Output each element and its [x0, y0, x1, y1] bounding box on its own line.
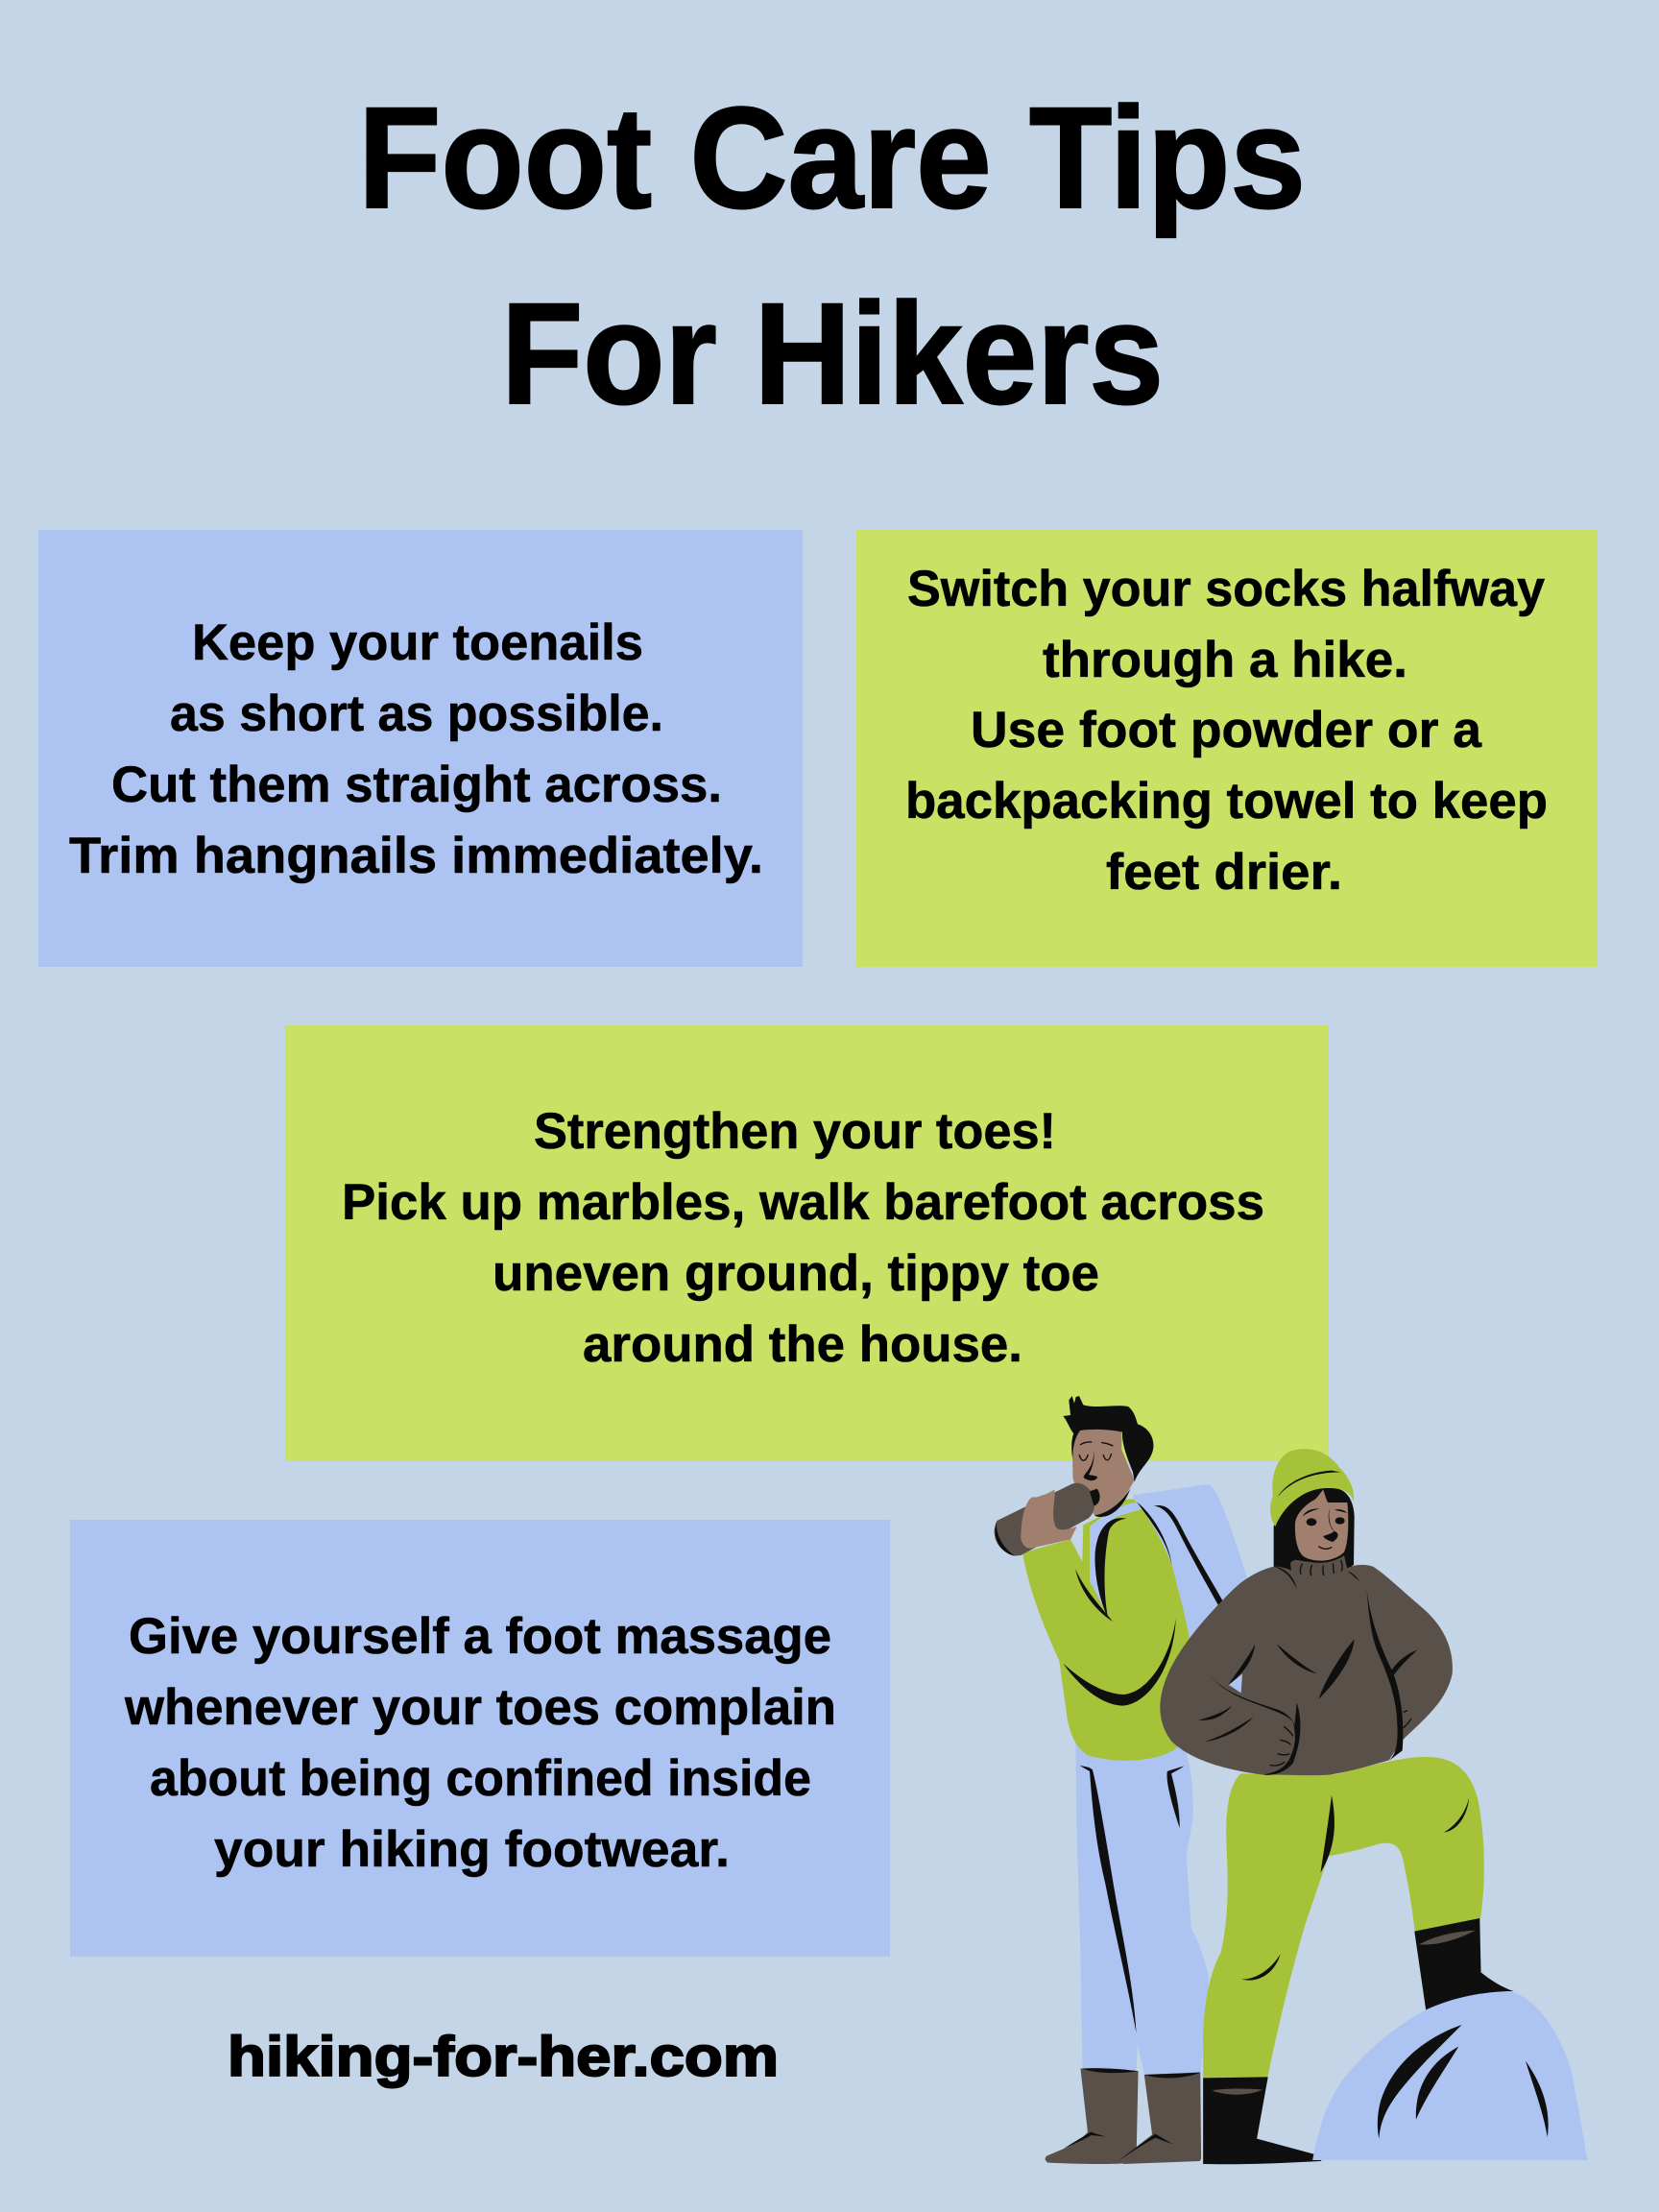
panel: toenails tip: as short as possible.: [170, 685, 663, 742]
rock: [1312, 1991, 1587, 2160]
title: Foot Care Tips: [358, 77, 1306, 238]
panel: socks tip: Use foot powder or a: [971, 702, 1482, 758]
panel: toenails tip: [38, 530, 803, 967]
hand and bottle: [995, 1483, 1094, 1556]
panel: socks tip: backpacking towel to keep: [905, 773, 1548, 830]
illustration: two hikers and rock: [995, 1396, 1587, 2164]
panel: foot massage tip: your hiking footwear.: [214, 1821, 730, 1878]
panel: socks tip: Switch your socks halfway: [907, 561, 1546, 617]
turtleneck: [1290, 1555, 1348, 1582]
beanie hat: [1270, 1449, 1354, 1527]
title: For Hikers: [501, 273, 1164, 434]
panel: foot massage tip: whenever your toes complain: [124, 1679, 836, 1736]
sweater: [1160, 1565, 1453, 1775]
man hiker legs and boots: [1046, 1741, 1209, 2164]
hair: [1274, 1487, 1355, 1572]
woman boots: [1203, 2077, 1322, 2164]
head: [1072, 1429, 1135, 1516]
backpack: [1133, 1484, 1248, 1693]
panel: toenails tip: Trim hangnails immediately.: [69, 828, 763, 884]
panel: foot massage tip: about being confined inside: [150, 1750, 811, 1807]
woman hiker upper body: [1160, 1449, 1453, 1775]
panel: strengthen toes tip: Strengthen your toes!: [534, 1103, 1056, 1160]
face: [1295, 1490, 1348, 1561]
panel: foot massage tip: Give yourself a foot massage: [129, 1608, 831, 1665]
man hiker torso, backpack and head: [995, 1396, 1248, 1761]
panel: foot massage tip: [70, 1520, 890, 1957]
panel: strengthen toes tip: Pick up marbles, walk barefoot across: [342, 1174, 1264, 1231]
website credit: hiking-for-her.com: [228, 2026, 779, 2088]
title: [358, 77, 1306, 434]
panel: toenails tip: Cut them straight across.: [111, 757, 722, 813]
panel: toenails tip: Keep your toenails: [192, 614, 643, 671]
jacket: [1022, 1500, 1190, 1761]
panel: strengthen toes tip: around the house.: [583, 1316, 1022, 1373]
panel: strengthen toes tip: uneven ground, tippy toe: [493, 1245, 1099, 1302]
panel: socks tip: through a hike.: [1043, 632, 1407, 688]
panel: socks tip: feet drier.: [1106, 844, 1342, 901]
woman hiker legs: [1203, 1757, 1587, 2164]
panel: strengthen toes tip: [285, 1025, 1329, 1461]
panel: socks tip: [856, 530, 1598, 967]
